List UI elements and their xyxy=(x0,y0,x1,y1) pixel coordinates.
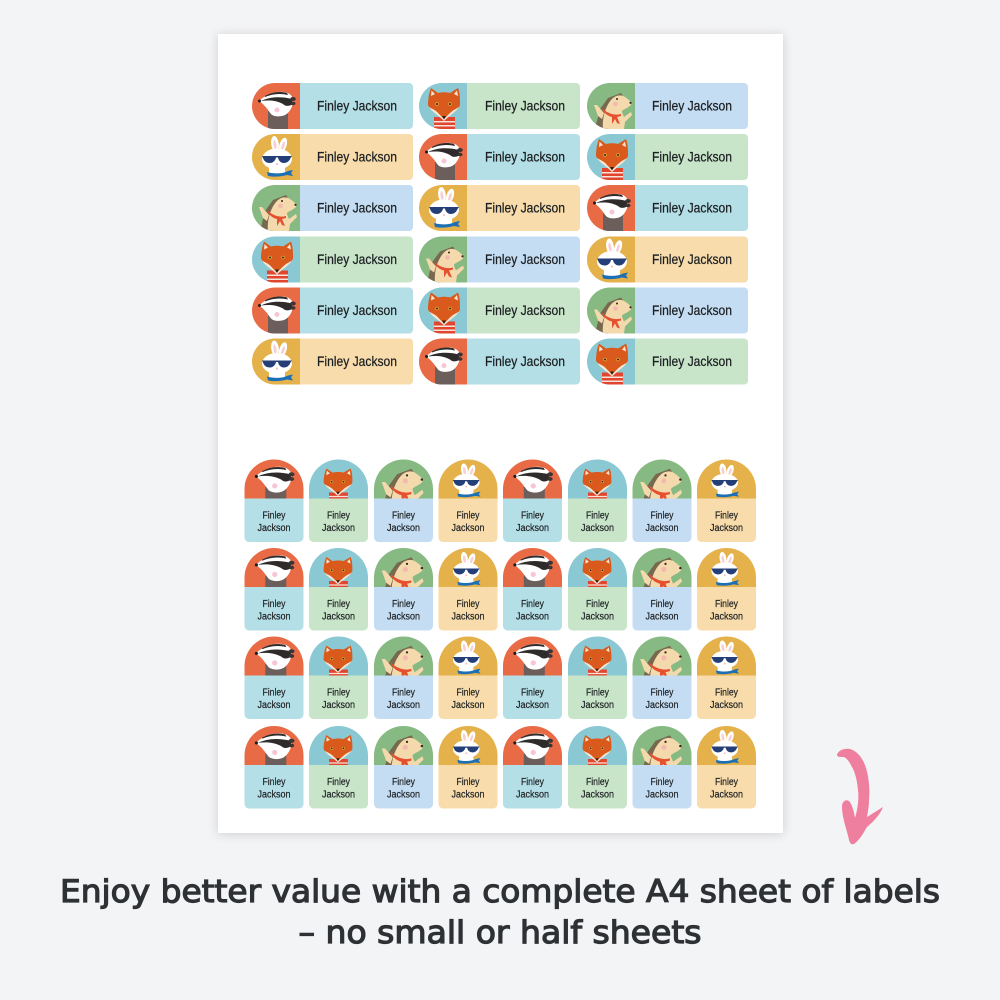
arched label row 4: Jackson xyxy=(258,790,290,800)
label: hedgehog: Finley Jackson xyxy=(652,98,732,114)
arched label row 2: Jackson xyxy=(516,612,549,622)
arched label row 3: Finley xyxy=(456,688,480,698)
arched label row 4: Jackson xyxy=(581,790,614,800)
label: fox: Finley Jackson xyxy=(485,98,565,114)
arched label row 1: Jackson xyxy=(516,523,549,534)
arched label row 2: Jackson xyxy=(322,612,355,622)
arched label row 1 xyxy=(244,460,756,542)
arched label row 3: Jackson xyxy=(581,700,614,711)
label: rabbit xyxy=(587,236,748,282)
heading line 1: Enjoy better value with a complete A4 sheet of labels xyxy=(60,874,940,910)
arched label row 2: Jackson xyxy=(258,612,290,622)
arched label row 1: Finley xyxy=(392,510,415,522)
arched label row 3: Finley xyxy=(392,688,415,698)
arched label row 4 xyxy=(244,726,756,808)
label: hedgehog xyxy=(587,288,748,334)
label: badger xyxy=(419,134,580,181)
arched label row 4: Finley xyxy=(262,777,286,788)
arched label row 2: Finley xyxy=(715,599,738,610)
arched label row 2: Jackson xyxy=(452,612,484,622)
arched label row 4: Jackson xyxy=(710,790,743,800)
arched label row 4: Jackson xyxy=(387,790,420,800)
label: rabbit xyxy=(419,185,580,231)
label: badger xyxy=(252,288,413,334)
arched label row 4: Finley xyxy=(327,777,350,788)
arched label row 3: Finley xyxy=(586,688,609,698)
arched label row 3 xyxy=(244,636,756,719)
arched label row 2: Finley xyxy=(650,599,674,610)
panel: arched name labels xyxy=(244,460,756,808)
arched label row 4: Finley xyxy=(586,777,609,788)
label: rabbit: Finley Jackson xyxy=(317,148,397,164)
A4 sheet xyxy=(218,34,783,833)
label: rabbit: Finley Jackson xyxy=(317,353,397,369)
arched label row 2: Jackson xyxy=(387,612,420,622)
panel: rectangular name labels xyxy=(252,83,748,386)
label: fox: Finley Jackson xyxy=(485,302,565,318)
arched label row 4: Jackson xyxy=(516,790,549,800)
arched label row 3: Finley xyxy=(521,688,544,698)
label: hedgehog xyxy=(252,185,413,231)
label: fox xyxy=(252,236,413,282)
arched label row 4: Finley xyxy=(456,777,480,788)
arrow: pink hand-drawn arrow xyxy=(837,749,883,844)
label: badger xyxy=(252,83,413,130)
arched label row 3: Jackson xyxy=(258,700,290,711)
arched label row 2: Jackson xyxy=(581,612,614,622)
label: badger: Finley Jackson xyxy=(652,200,732,216)
arched label row 2 xyxy=(244,548,756,630)
label: rabbit xyxy=(252,338,413,384)
arched label row 3: Jackson xyxy=(452,700,484,711)
arched label row 3: Finley xyxy=(650,688,674,698)
arched label row 3: Jackson xyxy=(516,700,549,711)
label: badger: Finley Jackson xyxy=(485,353,565,369)
arched label row 1: Jackson xyxy=(581,523,614,534)
arched label row 2: Finley xyxy=(262,599,286,610)
arched label row 4: Finley xyxy=(521,777,544,788)
label: rabbit: Finley Jackson xyxy=(485,200,565,216)
label: rabbit: Finley Jackson xyxy=(652,251,732,267)
arched label row 3: Finley xyxy=(262,688,286,698)
arched label row 1: Jackson xyxy=(258,523,290,534)
arched label row 1: Jackson xyxy=(452,523,484,534)
label: fox xyxy=(419,83,580,129)
arched label row 3: Finley xyxy=(327,688,350,698)
label: badger xyxy=(419,338,580,386)
label: fox: Finley Jackson xyxy=(652,353,732,369)
heading xyxy=(60,874,940,951)
label: fox xyxy=(587,134,748,180)
arched label row 1: Jackson xyxy=(646,523,678,534)
arched label row 2: Finley xyxy=(392,599,415,610)
label: hedgehog: Finley Jackson xyxy=(485,251,565,267)
label: badger: Finley Jackson xyxy=(317,302,397,318)
label: fox xyxy=(419,288,580,334)
label: hedgehog: Finley Jackson xyxy=(317,200,397,216)
heading line 2: – no small or half sheets xyxy=(298,915,702,951)
arched label row 4: Jackson xyxy=(322,790,355,800)
label: fox xyxy=(587,338,748,384)
label: fox: Finley Jackson xyxy=(652,148,732,164)
label: rabbit xyxy=(252,134,413,180)
arched label row 3: Jackson xyxy=(710,700,743,711)
arched label row 4: Jackson xyxy=(646,790,678,800)
arched label row 2: Finley xyxy=(327,599,350,610)
arched label row 4: Finley xyxy=(650,777,674,788)
arched label row 1: Finley xyxy=(327,510,350,522)
arched label row 3: Jackson xyxy=(646,700,678,711)
arched label row 1: Finley xyxy=(262,510,286,522)
arched label row 2: Jackson xyxy=(710,612,743,622)
arched label row 2: Finley xyxy=(586,599,609,610)
arched label row 1: Jackson xyxy=(322,523,355,534)
arched label row 1: Jackson xyxy=(710,523,743,534)
label: fox: Finley Jackson xyxy=(317,251,397,267)
arched label row 3: Finley xyxy=(715,688,738,698)
arched label row 4: Jackson xyxy=(452,790,484,800)
arched label row 1: Jackson xyxy=(387,523,420,534)
arched label row 1: Finley xyxy=(650,510,674,522)
label: badger xyxy=(587,185,748,232)
arched label row 1: Finley xyxy=(521,510,544,522)
arched label row 2: Finley xyxy=(521,599,544,610)
arched label row 2: Finley xyxy=(456,599,480,610)
label: hedgehog xyxy=(587,83,748,129)
arched label row 1: Finley xyxy=(715,510,738,522)
label: badger: Finley Jackson xyxy=(317,98,397,114)
arched label row 3: Jackson xyxy=(322,700,355,711)
arched label row 1: Finley xyxy=(456,510,480,522)
label: badger: Finley Jackson xyxy=(485,148,565,164)
label: hedgehog: Finley Jackson xyxy=(652,302,732,318)
label: hedgehog xyxy=(419,236,580,282)
arched label row 4: Finley xyxy=(715,777,738,788)
arched label row 1: Finley xyxy=(586,510,609,522)
arched label row 4: Finley xyxy=(392,777,415,788)
arched label row 2: Jackson xyxy=(646,612,678,622)
arched label row 3: Jackson xyxy=(387,700,420,711)
